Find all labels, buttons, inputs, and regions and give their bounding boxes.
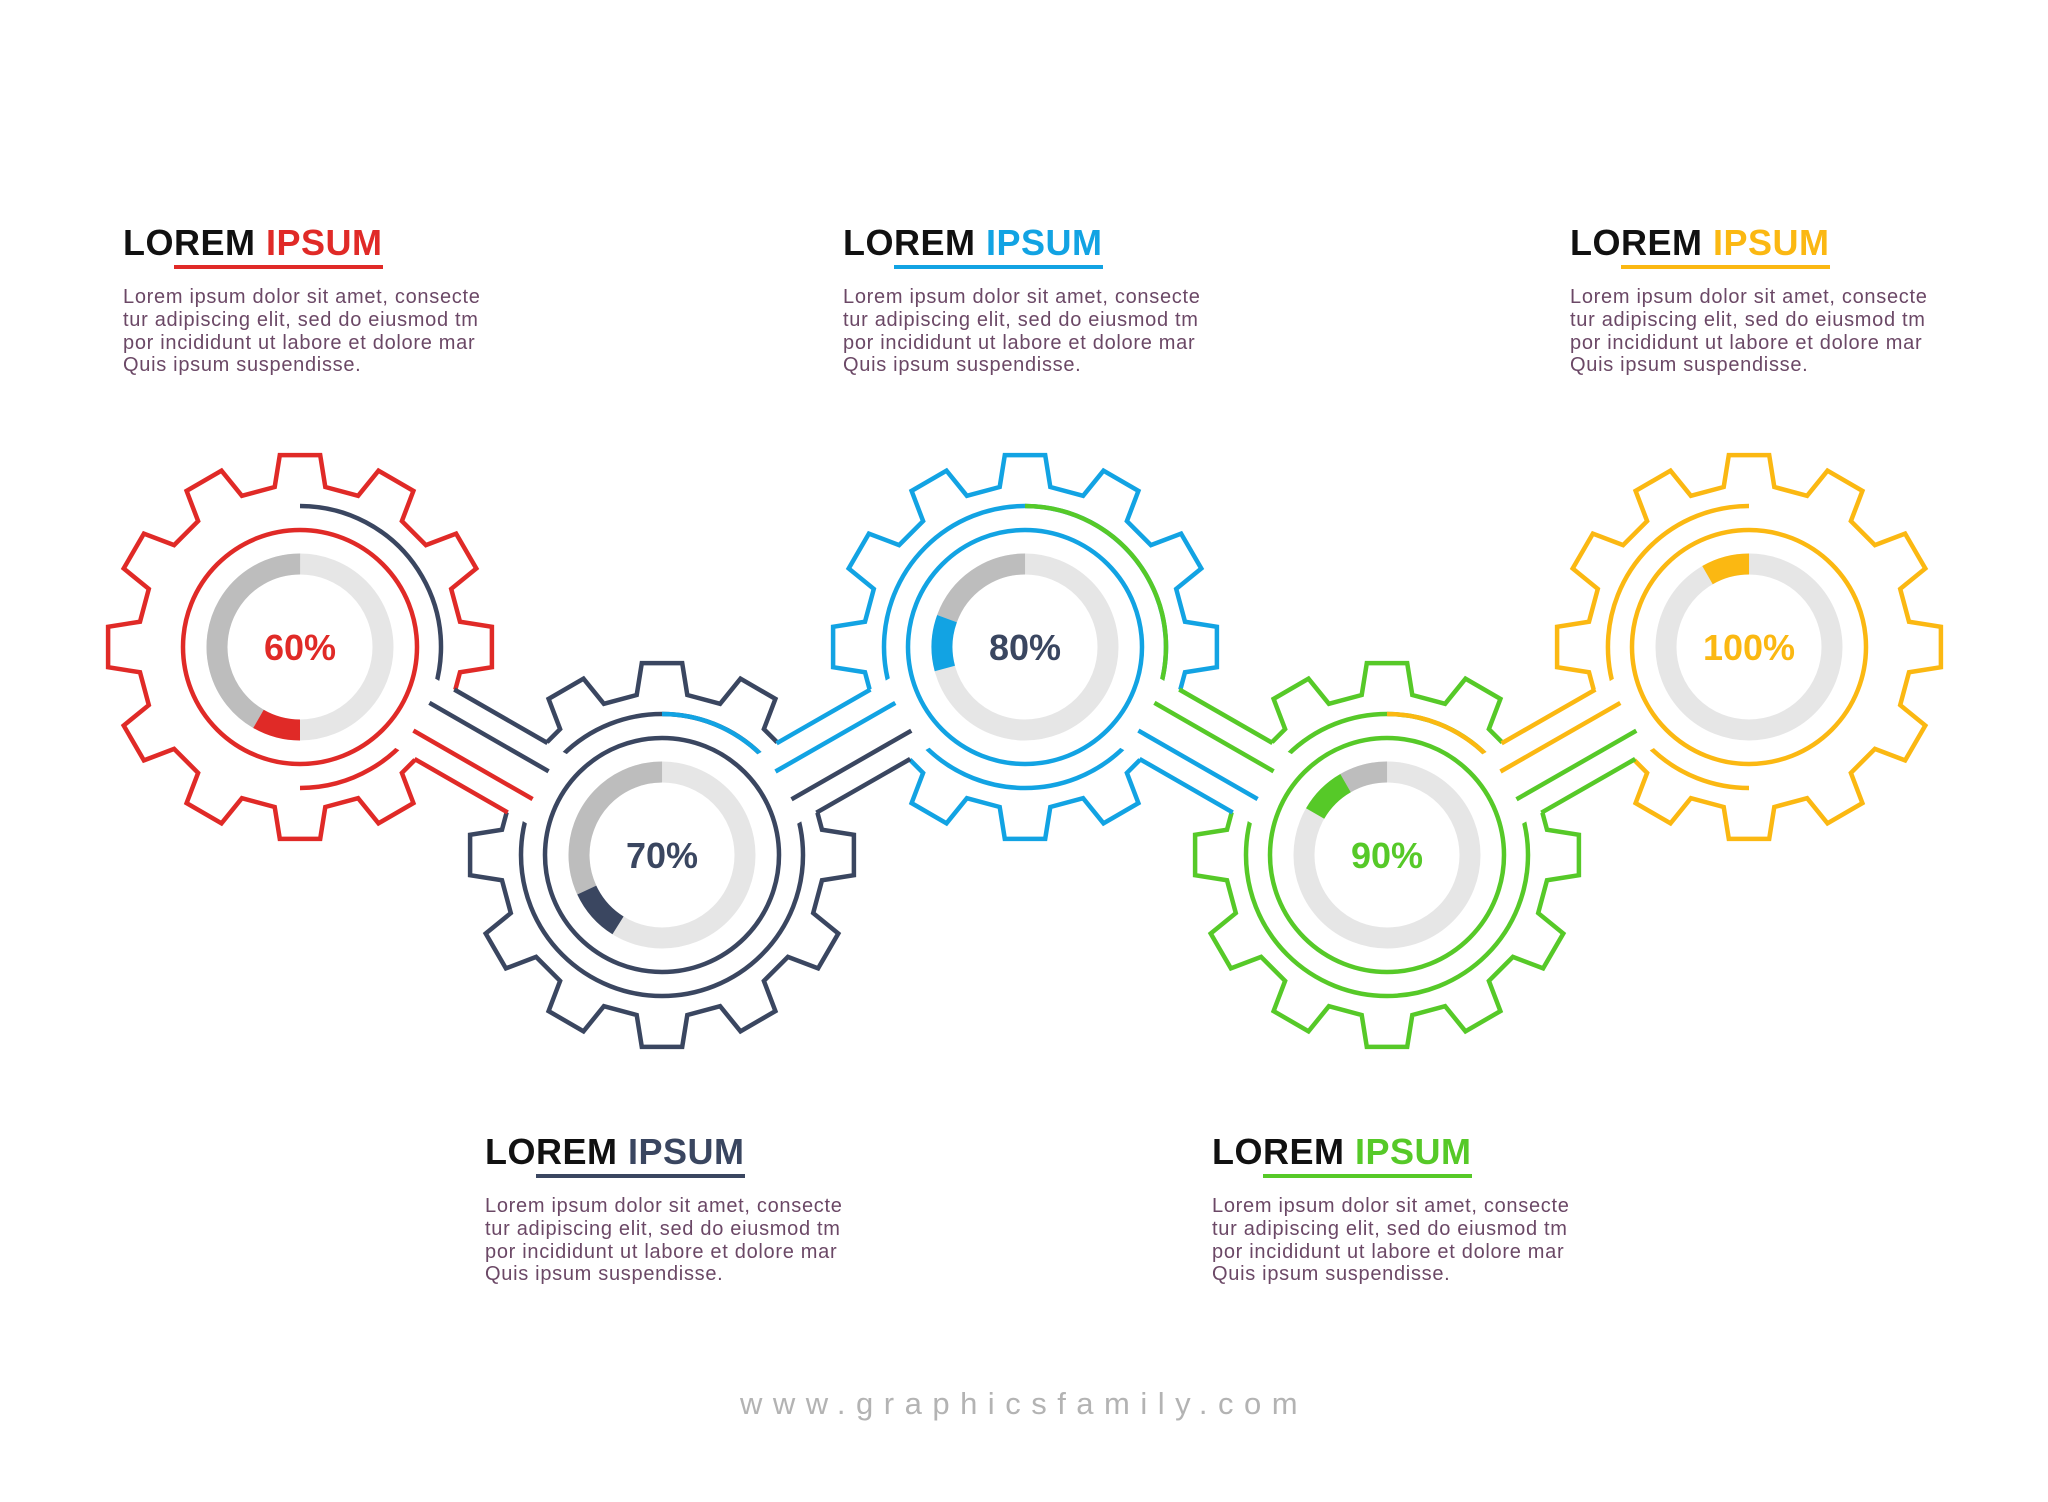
text: Lorem ipsum dolor sit amet, consecte [485,1195,843,1217]
text: Quis ipsum suspendisse. [123,354,361,376]
text: Lorem ipsum dolor sit amet, consecte [1212,1195,1570,1217]
donut: 60% [187,534,413,760]
text block: blue [843,222,1201,376]
text: Quis ipsum suspendisse. [1212,1263,1450,1285]
text: tur adipiscing elit, sed do eiusmod tm [843,309,1199,331]
text block: red [123,222,481,376]
text: tur adipiscing elit, sed do eiusmod tm [1570,309,1926,331]
text: por incididunt ut labore et dolore mar [1570,332,1922,354]
gear: blue 80% [833,455,1217,839]
connector: navy to blue [766,690,921,813]
text: Quis ipsum suspendisse. [485,1263,723,1285]
text: Quis ipsum suspendisse. [843,354,1081,376]
text block: yellow [1570,222,1928,376]
text block: navy [485,1131,843,1285]
donut: 70% [548,741,776,969]
text: tur adipiscing elit, sed do eiusmod tm [485,1218,841,1240]
connector: green to yellow [1491,690,1646,813]
gear: navy 70% [470,663,854,1047]
text: por incididunt ut labore et dolore mar [485,1241,837,1263]
donut: 100% [1636,534,1862,760]
donut: 60%: 60% [264,627,336,668]
text: tur adipiscing elit, sed do eiusmod tm [123,309,479,331]
text: Lorem ipsum dolor sit amet, consecte [1570,286,1928,308]
text: Lorem ipsum dolor sit amet, consecte [843,286,1201,308]
gear: red 60% [108,455,492,839]
donut: 90%: 90% [1351,835,1423,876]
text block: green: LOREM IPSUM [1212,1131,1472,1172]
text: por incididunt ut labore et dolore mar [843,332,1195,354]
text: por incididunt ut labore et dolore mar [1212,1241,1564,1263]
text block: navy: LOREM IPSUM [485,1131,745,1172]
donut: 100%: 100% [1703,627,1795,668]
text block: green [1212,1131,1570,1285]
text: tur adipiscing elit, sed do eiusmod tm [1212,1218,1568,1240]
donut: 80% [919,541,1131,753]
gear: green 90% [1195,663,1579,1047]
text: Quis ipsum suspendisse. [1570,354,1808,376]
donut: 80%: 80% [989,627,1061,668]
text: por incididunt ut labore et dolore mar [123,332,475,354]
text: Lorem ipsum dolor sit amet, consecte [123,286,481,308]
text block: blue: LOREM IPSUM [843,222,1103,263]
connector: red to navy [404,690,558,812]
text block: red: LOREM IPSUM [123,222,383,263]
connector: blue to green [1129,690,1283,812]
footer url: www.graphicsfamily.com [740,1386,1308,1421]
donut: 70%: 70% [626,835,698,876]
gear: yellow 100% [1557,455,1941,839]
donut: 90% [1274,742,1500,968]
text block: yellow: LOREM IPSUM [1570,222,1830,263]
